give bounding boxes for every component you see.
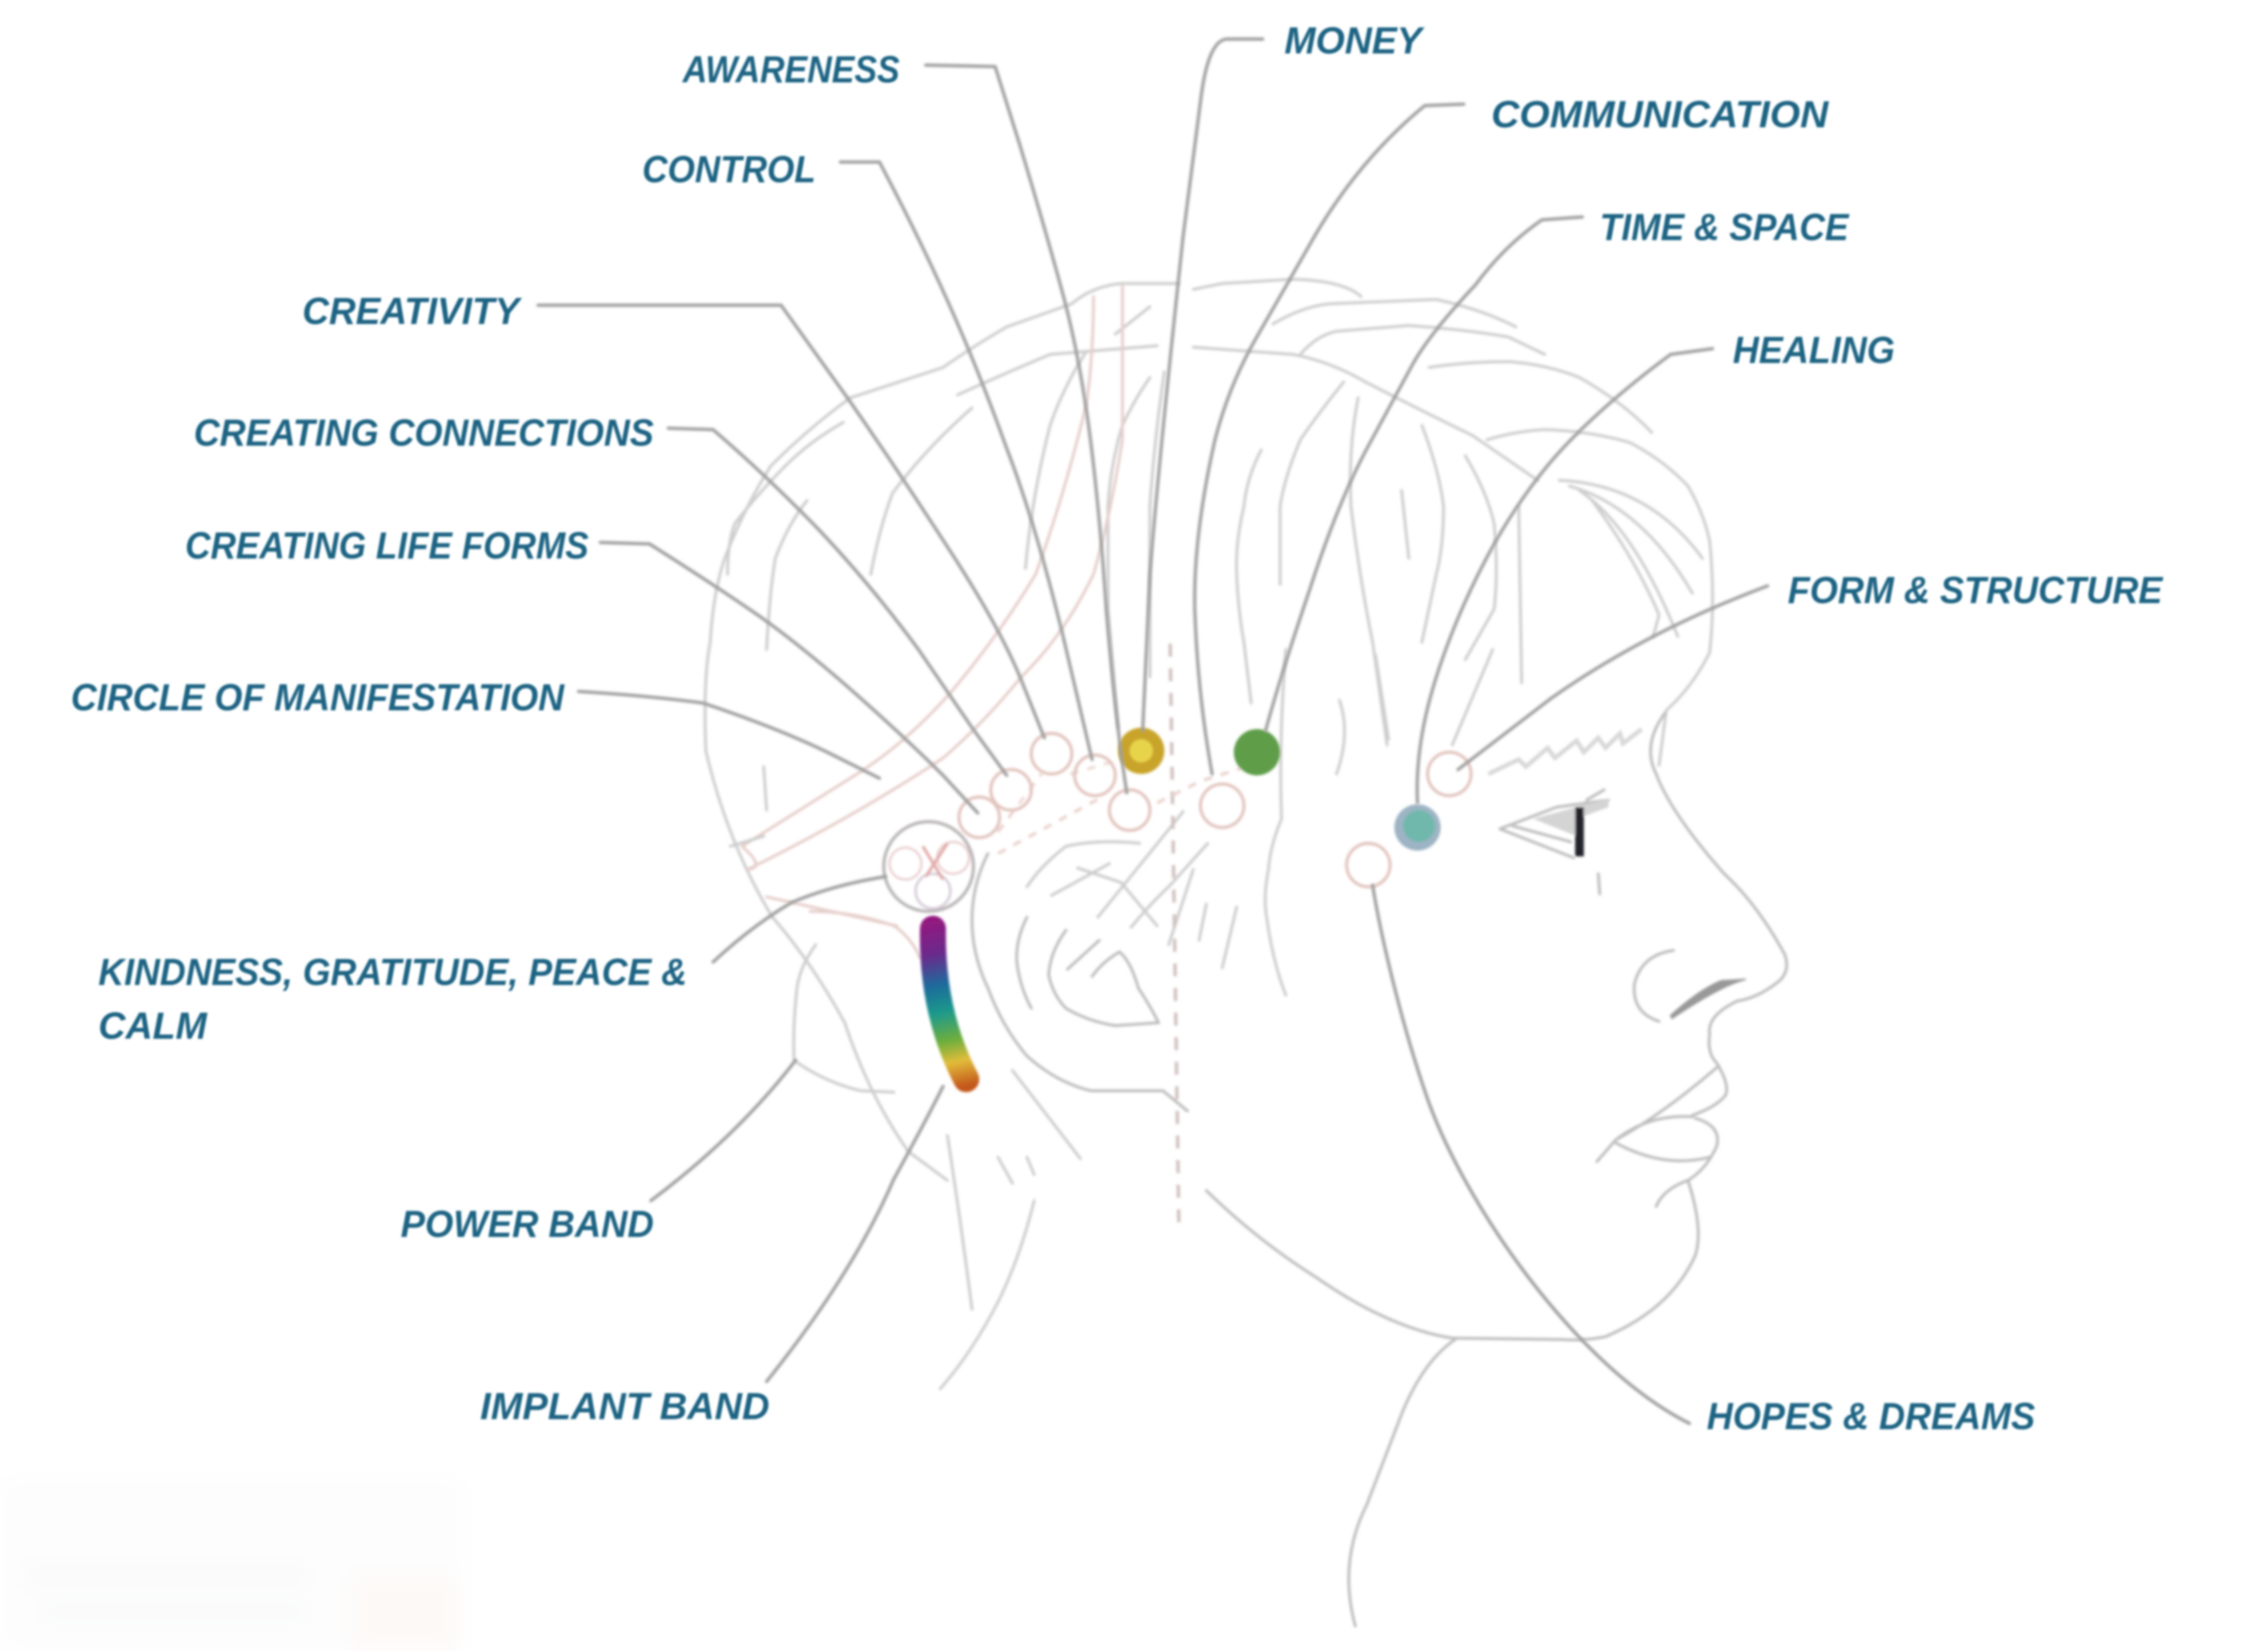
ear <box>972 854 1188 1111</box>
circle: awareness point <box>1109 790 1150 831</box>
leader lines <box>538 39 1768 1424</box>
label: creating life forms: CREATING LIFE FORMS <box>185 525 589 566</box>
nose <box>1634 950 1746 1021</box>
circle: hopes and dreams point <box>1347 844 1390 887</box>
leader: power band <box>651 1060 796 1201</box>
label: money: MONEY <box>1285 20 1425 62</box>
leader: implant band <box>767 1086 943 1382</box>
faint smudge: ghosted text bottom-left <box>0 1479 463 1651</box>
leader: money <box>1143 39 1263 731</box>
label: power band: POWER BAND <box>400 1203 654 1245</box>
label: communication: COMMUNICATION <box>1491 94 1830 136</box>
circle: form and structure point <box>1428 752 1471 796</box>
face profile <box>1206 713 1787 1626</box>
label: creating connections: CREATING CONNECTIONS <box>194 412 654 454</box>
leader: time and space <box>1266 217 1582 731</box>
leader: communication <box>1195 104 1464 774</box>
point markers and bands <box>884 728 1471 1079</box>
label: implant band: IMPLANT BAND <box>480 1385 770 1427</box>
coloured channels of the head <box>731 286 1122 958</box>
circle: creating life forms point <box>959 797 999 838</box>
circle: control point <box>1075 755 1115 796</box>
hair and back of head <box>705 279 1713 1389</box>
centre dashed line <box>1170 644 1179 1222</box>
labels <box>71 20 2164 1438</box>
circle: communication point <box>1201 784 1244 828</box>
leader: awareness <box>926 65 1127 793</box>
label: hopes and dreams: HOPES & DREAMS <box>1707 1396 2035 1438</box>
label: time and space: TIME & SPACE <box>1600 207 1850 249</box>
eye and eyebrow <box>1488 729 1642 894</box>
circle: healing point (teal) <box>1394 805 1441 851</box>
leader: hopes and dreams <box>1373 885 1689 1424</box>
label: kindness, gratitude, peace and calm: CALM <box>99 1005 208 1047</box>
circle: creativity point <box>1031 734 1072 774</box>
dashed links between points <box>998 760 1256 854</box>
circle of manifestation <box>884 822 973 911</box>
label: kindness, gratitude, peace and calm: KINDNESS, GRATITUDE, PEACE & <box>99 952 687 994</box>
circle: time and space point (green) <box>1234 729 1280 776</box>
leader: creating connections <box>668 428 1006 776</box>
leader: control <box>840 162 1092 760</box>
label: healing: HEALING <box>1733 330 1895 372</box>
leader: healing <box>1417 349 1713 803</box>
circle: money point (yellow) <box>1118 728 1164 774</box>
label: creativity: CREATIVITY <box>302 291 523 333</box>
illustration: head line art <box>705 279 1787 1626</box>
leader: form and structure <box>1458 586 1768 770</box>
label: form and structure: FORM & STRUCTURE <box>1788 569 2164 611</box>
implant band: rainbow <box>933 929 966 1079</box>
label: control: CONTROL <box>642 149 816 191</box>
leader: creativity <box>538 305 1044 738</box>
label: awareness: AWARENESS <box>682 49 900 91</box>
leader: creating life forms <box>600 542 978 813</box>
label: circle of manifestation: CIRCLE OF MANIFESTATION <box>71 676 565 718</box>
leader: kindness, gratitude, peace and calm <box>713 877 885 962</box>
leader: circle of manifestation <box>579 692 879 779</box>
circle: creating connections point <box>991 770 1031 810</box>
